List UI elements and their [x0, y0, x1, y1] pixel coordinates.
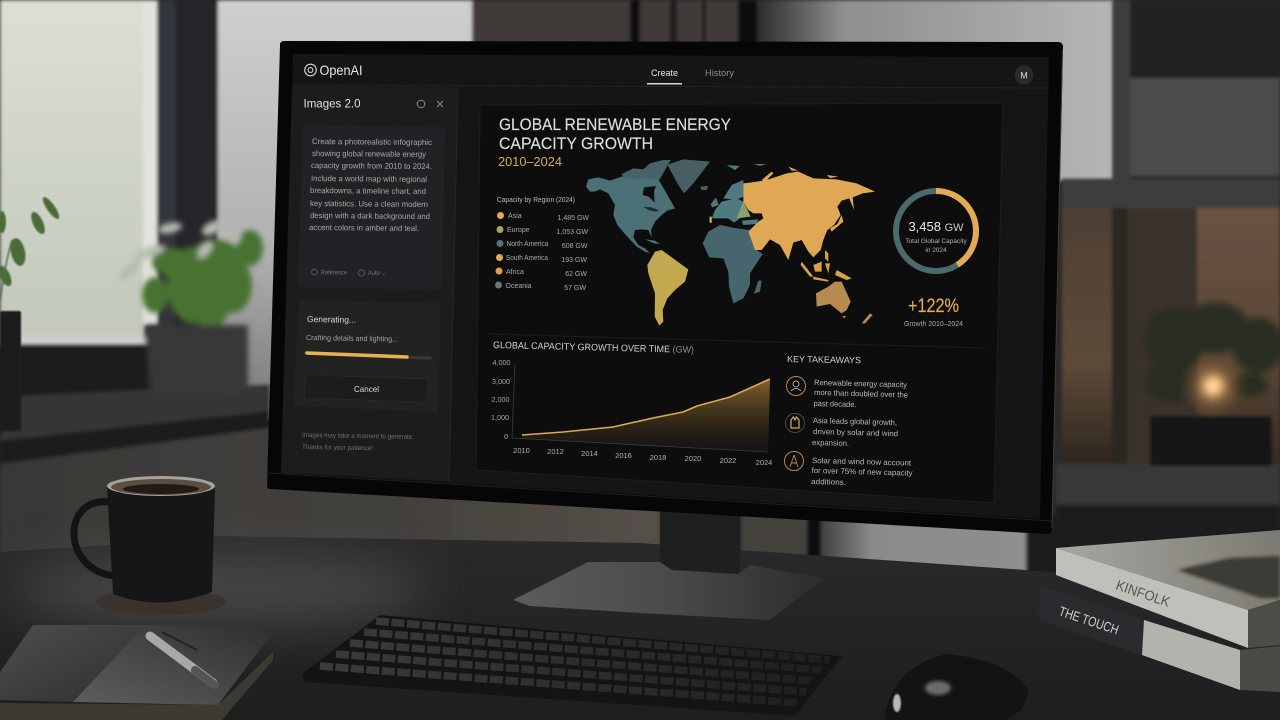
book: the touch: THE TOUCH [1057, 604, 1121, 638]
britain [711, 198, 719, 207]
donut caption [905, 238, 967, 254]
region legend: Europe [507, 227, 530, 234]
x axis labels: 2020 [685, 454, 701, 463]
screen [281, 54, 1049, 519]
new zealand [843, 313, 873, 323]
madagascar [754, 281, 762, 294]
takeaway 1: past decade. [813, 399, 857, 409]
arctic russia islands [762, 167, 838, 182]
stand base [513, 562, 824, 620]
pen [150, 632, 215, 685]
avatar [1014, 66, 1034, 84]
prompt card [298, 125, 445, 290]
growth stat: Growth 2010–2024 [904, 319, 963, 328]
arctic islands [622, 160, 671, 180]
chart heading: GLOBAL CAPACITY GROWTH OVER TIME (GW) [493, 340, 694, 356]
cancel button: Cancel [354, 384, 379, 394]
region legend: 57 GW [564, 285, 586, 292]
x axis labels: 2018 [650, 453, 666, 462]
progress bar [306, 353, 430, 358]
prompt options: Auto ⌄ [368, 270, 386, 277]
mouse [885, 654, 1028, 720]
book: kinfolk [1056, 530, 1280, 648]
australia [816, 282, 851, 313]
top bar [293, 62, 1048, 88]
donut chart [896, 191, 976, 271]
generating card [293, 300, 441, 412]
generating status: Crafting details and lighting... [306, 333, 398, 344]
y axis labels [491, 358, 510, 441]
hudson bay [643, 186, 656, 203]
region legend: South America [506, 255, 548, 262]
turkey [742, 219, 758, 225]
takeaway 2 [786, 414, 898, 448]
sidebar note [302, 432, 414, 452]
coaster [96, 589, 226, 615]
lower wall [0, 428, 660, 560]
plant: left window [0, 195, 62, 431]
prompt card: breakdowns, a timeline chart, and [310, 186, 426, 196]
eastern europe [737, 202, 751, 218]
takeaway 3: Solar and wind now account [812, 456, 912, 468]
x axis labels: 2012 [547, 447, 564, 456]
great lakes [643, 207, 659, 212]
region legend: 1,053 GW [556, 229, 588, 236]
plant: potted on sill [117, 217, 263, 399]
chart line [522, 379, 770, 435]
region legend: 1,485 GW [557, 215, 589, 222]
x axis labels: 2022 [720, 456, 736, 465]
region legend: Oceania [506, 283, 532, 290]
prompt card: accent colors in amber and teal. [309, 223, 419, 233]
keyboard [302, 615, 842, 716]
x axis labels: 2024 [756, 458, 772, 467]
japan [830, 215, 843, 232]
region legend [495, 195, 589, 292]
takeaway 1: more than doubled over the [814, 388, 908, 399]
centre back wall [472, 0, 762, 60]
monitor [267, 41, 1063, 534]
y axis labels: 4,000 [492, 358, 510, 367]
scandinavia [723, 180, 743, 200]
books [1039, 530, 1280, 692]
legend heading: Capacity by Region (2024) [497, 195, 575, 204]
sidebar note: Thanks for your patience! [302, 444, 373, 452]
region legend: 62 GW [565, 271, 587, 278]
notebook cover [0, 625, 145, 702]
donut caption: in 2024 [925, 247, 947, 254]
takeaway 2: expansion. [812, 438, 849, 448]
tab: create: Create [651, 68, 678, 79]
europe [712, 198, 743, 223]
prompt options: Reference [321, 270, 347, 276]
caribbean [645, 239, 660, 244]
asia [743, 172, 875, 260]
region legend: Asia [508, 213, 522, 220]
book: kinfolk: KINFOLK [1114, 577, 1173, 610]
takeaway 3 [784, 452, 913, 487]
prompt card: design with a dark background and [310, 211, 430, 221]
keyboard keys [320, 621, 830, 703]
north america [586, 177, 675, 253]
prompt card: showing global renewable energy [312, 149, 426, 159]
prompt card: capacity growth from 2010 to 2024. [311, 161, 432, 171]
sidebar title: Images 2.0 [304, 96, 361, 110]
notebook page edge [0, 652, 273, 720]
prompt card: Include a world map with regional [311, 174, 427, 184]
takeaway 3: for over 75% of new capacity [811, 466, 913, 478]
bookshelf [1056, 0, 1280, 545]
tab: history: History [705, 68, 734, 79]
takeaways heading: KEY TAKEAWAYS [787, 354, 861, 365]
desk [0, 536, 1280, 720]
monitor bezel [267, 41, 1063, 534]
infographic years: 2010–2024 [498, 154, 562, 169]
takeaway 3: additions. [811, 477, 846, 487]
wall under monitor [742, 515, 807, 575]
x axis labels: 2010 [513, 446, 530, 455]
y axis labels: 1,000 [491, 413, 509, 422]
infographic title [499, 115, 731, 153]
window [0, 0, 220, 396]
region legend: 193 GW [561, 257, 587, 264]
africa [703, 225, 763, 303]
world map [586, 159, 875, 326]
left wall [218, 0, 480, 420]
svalbard [727, 164, 767, 170]
openai logo [305, 64, 316, 76]
plant: shelf lamp glow [1145, 302, 1280, 466]
sidebar icons [417, 100, 443, 108]
sidebar note: Images may take a moment to generate. [302, 432, 414, 441]
region legend: 608 GW [562, 243, 588, 250]
left sidebar [281, 86, 458, 481]
brand name: OpenAI [320, 62, 362, 78]
takeaway 1 [786, 376, 908, 409]
notebook [0, 625, 273, 720]
greenland [667, 159, 710, 193]
region legend: Africa [506, 269, 524, 276]
x axis labels: 2016 [615, 451, 632, 460]
y axis labels: 0 [504, 432, 508, 441]
y axis labels: 3,000 [492, 377, 510, 386]
growth stat: +122% [908, 296, 959, 317]
infographic panel [476, 103, 1003, 503]
y axis labels: 2,000 [492, 395, 510, 404]
region legend: North America [506, 241, 549, 248]
key takeaways [784, 354, 913, 487]
notebook band [73, 625, 273, 705]
donut caption: Total Global Capacity [905, 238, 967, 245]
avatar: M [1020, 70, 1028, 80]
cancel button [304, 375, 428, 402]
chart axes [512, 363, 768, 452]
growth stat [904, 296, 963, 328]
portugal [710, 217, 712, 223]
shelf box [1130, 78, 1280, 176]
tab underline [647, 83, 682, 84]
window sill [0, 384, 270, 441]
book: the touch [1039, 585, 1280, 692]
takeaway 2: Asia leads global growth, [813, 416, 897, 427]
south america [647, 250, 688, 326]
donut value: 3,458 GW [908, 219, 964, 234]
monitor stand [513, 505, 824, 620]
takeaway 1: Renewable energy capacity [814, 378, 907, 389]
southeast asia [801, 250, 852, 282]
prompt options [312, 269, 386, 277]
area chart [491, 358, 772, 467]
infographic title: CAPACITY GROWTH [499, 134, 653, 153]
chart area [522, 379, 770, 452]
x axis labels [513, 446, 772, 467]
takeaway 2: driven by solar and wind [813, 427, 898, 438]
infographic title: GLOBAL RENEWABLE ENERGY [499, 115, 731, 134]
generating heading: Generating... [307, 314, 356, 325]
iceland [700, 186, 708, 190]
x axis labels: 2014 [581, 449, 598, 458]
prompt card: key statistics. Use a clean modern [310, 199, 428, 209]
coffee mug [74, 476, 226, 615]
prompt card: Create a photorealistic infographic [312, 137, 432, 147]
